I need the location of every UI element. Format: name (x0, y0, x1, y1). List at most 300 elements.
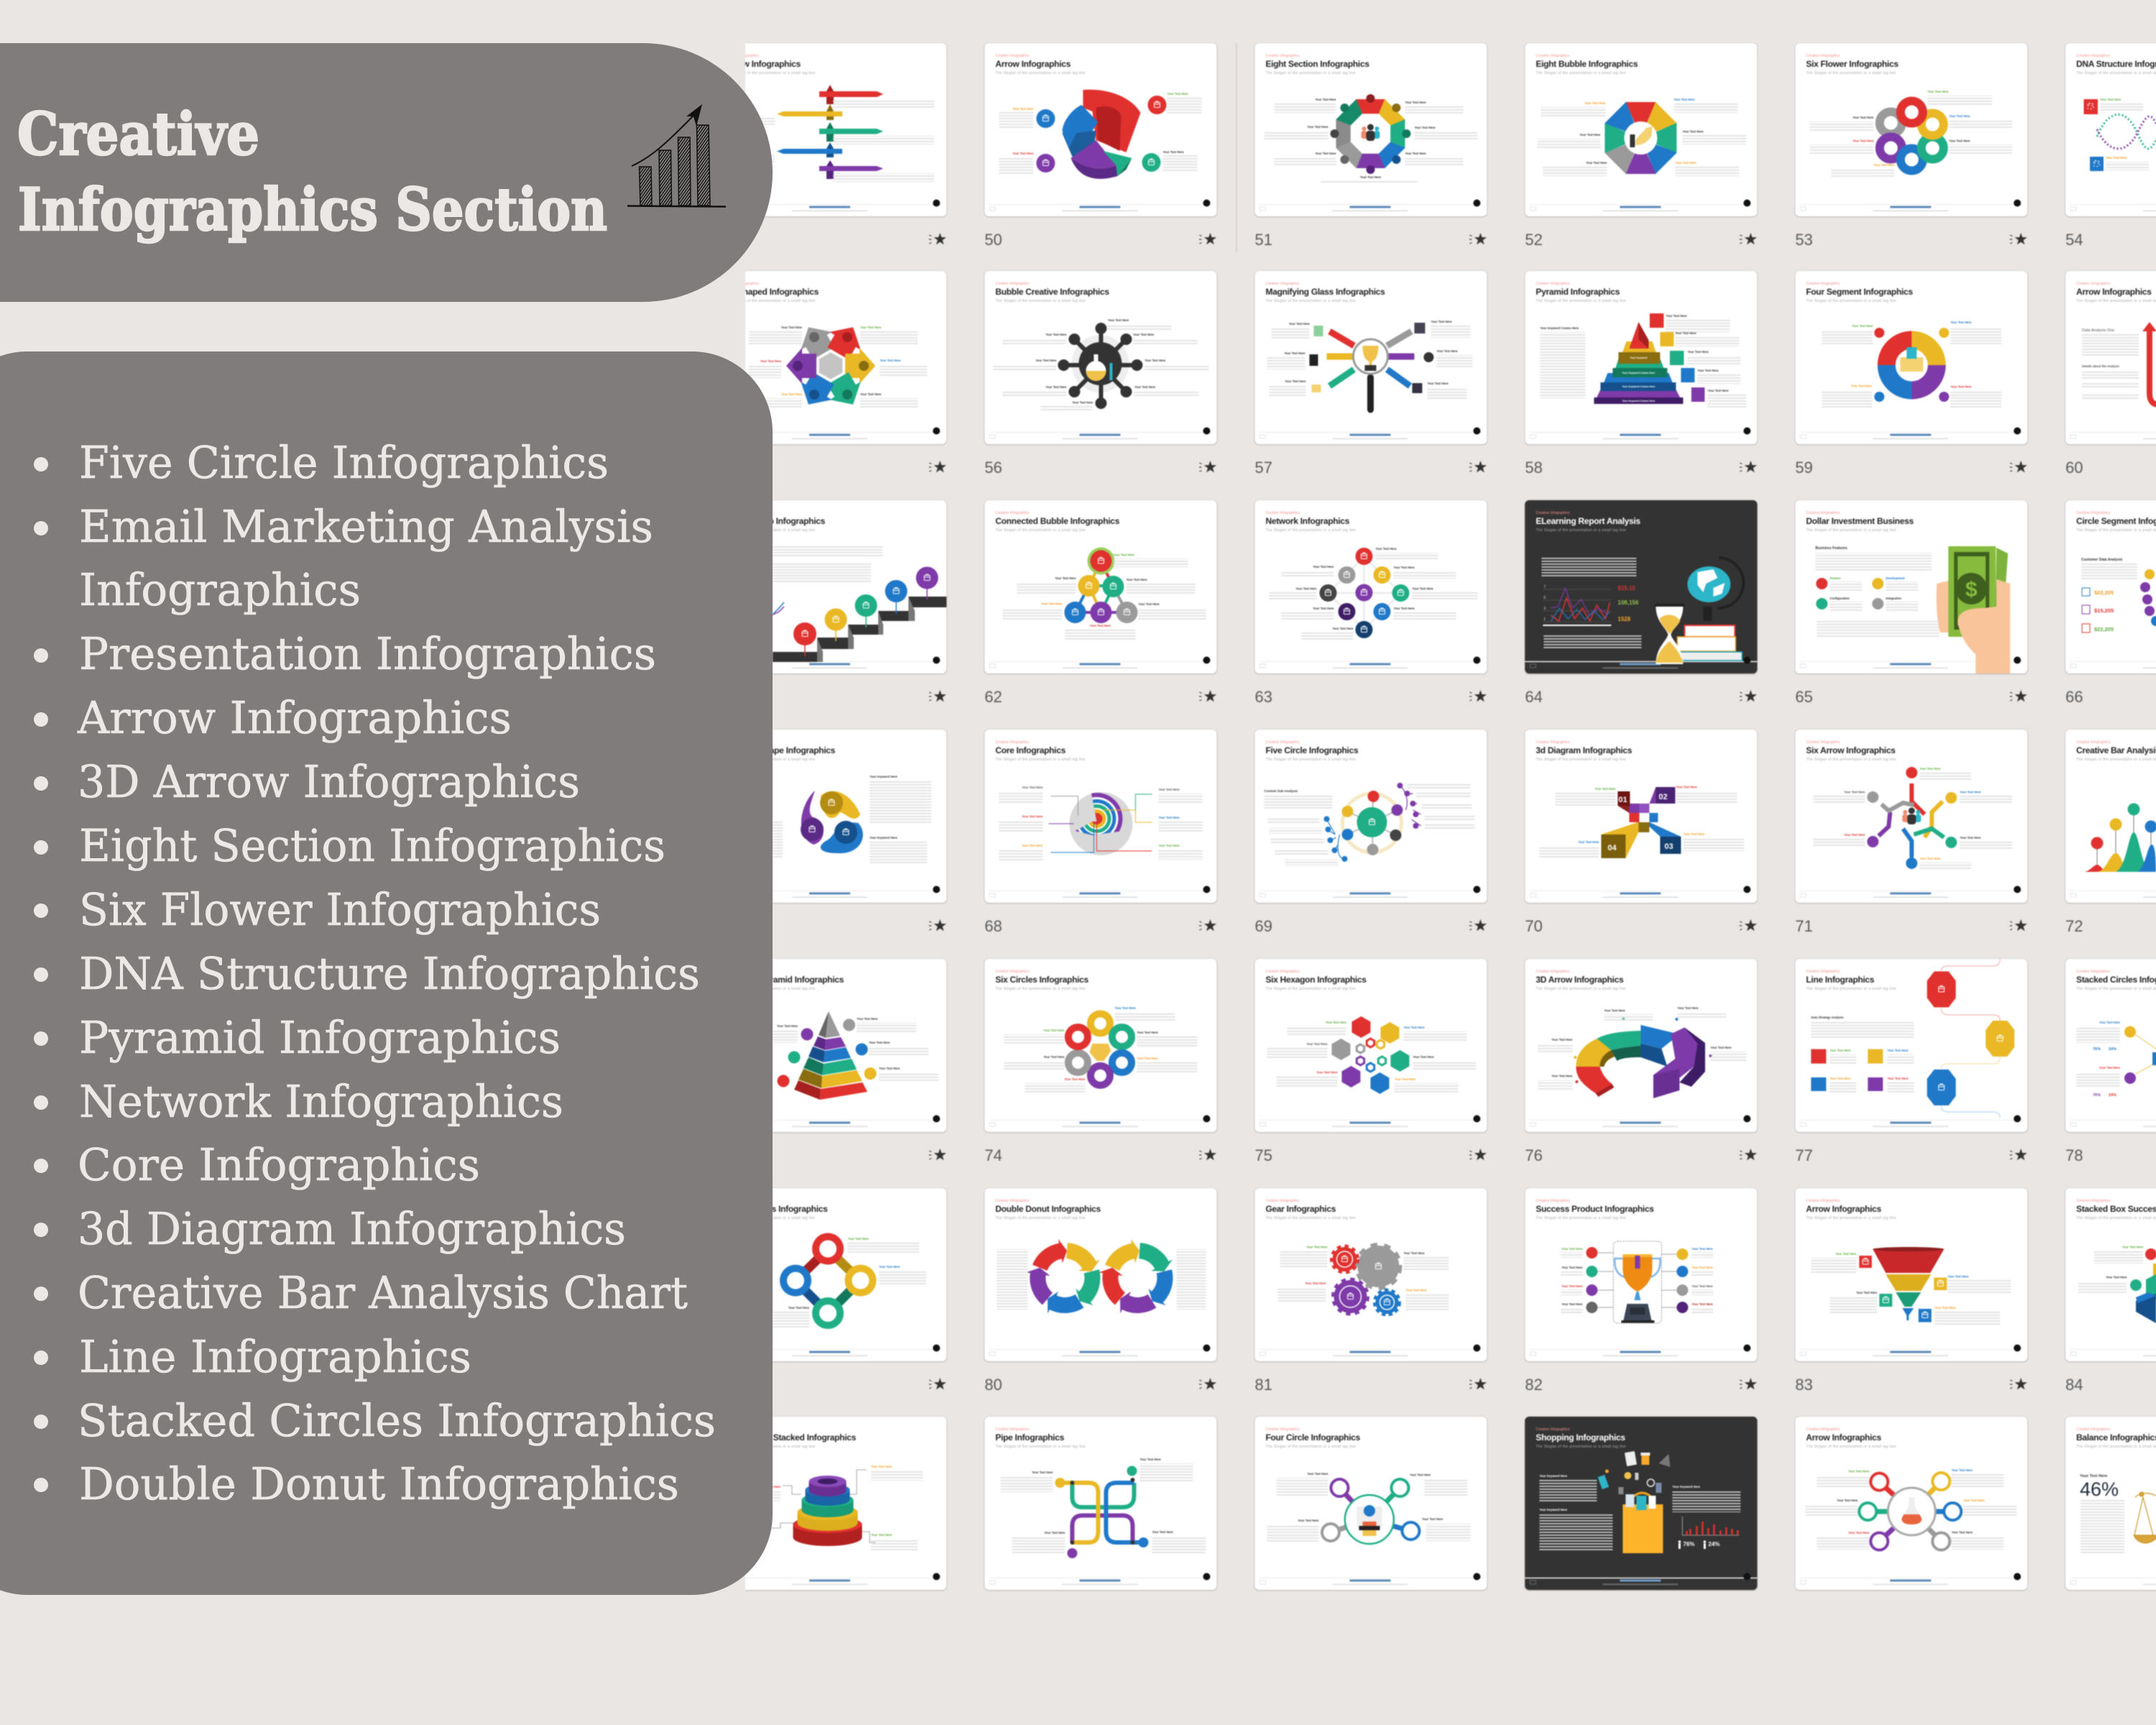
slide title: Creative Infographics (995, 740, 1030, 745)
slide title (1266, 282, 1386, 303)
icon: star (1199, 919, 1217, 931)
text blocks: Your Keyword Here (1539, 1474, 1567, 1478)
callouts: Your Text Here (1022, 844, 1044, 847)
callouts: Your Text Here (1952, 1531, 1973, 1534)
slide title: Creative Infographics (1536, 282, 1570, 286)
slide title: Dollar Investment Business (1806, 516, 1914, 526)
slide title (773, 746, 836, 762)
callouts: Your Text Here (1887, 1049, 1909, 1052)
callouts: Your Text Here (1437, 349, 1458, 353)
callouts: Your Text Here (1393, 607, 1415, 610)
card 69: Five Circle Infographics (1254, 729, 1488, 935)
slide title: Bubble Creative Infographics (995, 287, 1110, 297)
icon: star (1469, 233, 1487, 244)
slide title (1266, 1427, 1360, 1449)
callouts (1003, 553, 1206, 640)
slide title: Creative Infographics (1266, 1199, 1300, 1203)
callouts (1539, 786, 1744, 859)
icon: star (1739, 461, 1757, 472)
callouts: Your Text Here (1413, 1055, 1434, 1059)
slide title: 3d Diagram Infographics (1536, 745, 1632, 755)
diagram: hub with four circles (1322, 1479, 1419, 1544)
diagram: stacked boxes (2130, 1248, 2156, 1323)
slide title (1266, 511, 1356, 533)
stats: Customer Data Analysis (2081, 558, 2123, 562)
slide title: The Slogan of the presentation or a small tag line (1536, 987, 1626, 991)
text blocks: Your Keyword Here (1672, 1485, 1700, 1489)
slide title: Creative Infographics (1536, 511, 1570, 515)
card 84: Stacked Box Success (2065, 1187, 2156, 1394)
icon: rising bar chart with arrow (627, 104, 726, 207)
callouts: Your Keyword Comes Here (1540, 326, 1579, 330)
diagram: flask hub with six nodes (1859, 1473, 1961, 1550)
slide title: Creative Infographics (995, 970, 1030, 974)
chart: mound bars with pins (2085, 804, 2156, 872)
slide number: 77 (1795, 1146, 1812, 1164)
slide title (1266, 1199, 1356, 1220)
slide title: Creative Infographics (725, 740, 760, 745)
stats: $22,205 (2094, 626, 2114, 632)
callouts: Your Text Here (1055, 576, 1077, 580)
callouts: Your Text Here (1586, 161, 1608, 165)
slide title: Creative Infographics (725, 54, 760, 58)
slide number: 78 (2065, 1146, 2083, 1164)
slide title: Creative Infographics (2076, 740, 2111, 745)
slide title: The Slogan of the presentation or a small tag line (995, 987, 1086, 991)
callouts: Your Text Here (1332, 627, 1354, 630)
slide title: Creative Infographics (725, 1427, 760, 1432)
icon: star (2009, 233, 2027, 244)
callouts: Your Text Here (1675, 161, 1697, 165)
slide title (1536, 511, 1641, 533)
callouts: Your Text Here (1852, 324, 1874, 328)
callouts: Your Text Here (1022, 814, 1044, 818)
diagram: hub and branches (1324, 783, 1421, 862)
slide title: The Slogan of the presentation or a small tag line (1536, 528, 1626, 533)
card 65: Dollar Investment Business (1795, 500, 2028, 706)
list items: Network Infographics (79, 1075, 563, 1128)
callouts: Your Text Here (1692, 1284, 1713, 1288)
slide title (1806, 511, 1914, 533)
callouts: Your Text Here (848, 1237, 869, 1241)
callouts: Your Text Here (2100, 98, 2122, 101)
slide number: 58 (1525, 459, 1542, 477)
card 82: Success Product Infographics (1524, 1187, 1758, 1394)
diagram: staircase with pins (772, 566, 946, 662)
slide number: 72 (2065, 917, 2083, 935)
card: Shape Infographics (partly hidden) (773, 730, 947, 932)
slide title: Creative Infographics (1266, 1427, 1300, 1432)
slide title (2076, 282, 2156, 303)
callouts: Your Text Here (1167, 92, 1189, 96)
slide title: The Slogan of the presentation or a small tag line (1806, 1445, 1897, 1449)
icon: star (1469, 461, 1487, 472)
callouts: Your Text Here (1405, 152, 1427, 155)
icon: star (1739, 1378, 1757, 1389)
card: Shopping Infographics (1524, 1416, 1758, 1591)
callouts: Your Text Here (1137, 1057, 1158, 1060)
card: Stacked Infographics (partly hidden) (714, 1416, 947, 1591)
diagram: earth core cutaway (1049, 792, 1152, 855)
callouts: Your Text Here (1032, 1471, 1054, 1474)
icon: star (2009, 1149, 2027, 1160)
slide title: The Slogan of the presentation or a small tag line (1806, 71, 1897, 75)
diagram: 3D pyramid (778, 1011, 877, 1100)
slide title: Six Flower Infographics (1806, 59, 1899, 69)
callouts: Your Text Here (1851, 385, 1872, 388)
slide title (995, 282, 1110, 303)
slide title: Creative Infographics (995, 54, 1030, 58)
slide title: Ladder Step Infographics (726, 516, 826, 526)
slide title: Creative Infographics (1806, 970, 1841, 974)
slide title: Creative Infographics (1266, 282, 1300, 286)
list items: Presentation Infographics (79, 627, 656, 680)
card: Step Infographics (partly hidden) (773, 500, 947, 702)
callouts: Your Text Here (1948, 1275, 1969, 1278)
callouts: Your Text Here (1158, 816, 1180, 819)
callouts: Your Text Here (1710, 1046, 1732, 1049)
list items (77, 436, 716, 1510)
stats: $22,205 (2094, 589, 2114, 596)
callouts: Your Text Here (1046, 385, 1067, 389)
slide title: Four Circles Infographics (729, 1204, 828, 1214)
icon: star (2009, 1378, 2027, 1389)
callouts: Your Text Here (1887, 1077, 1909, 1080)
slide title: Double Donut Infographics (995, 1204, 1101, 1214)
card 76: 3D Arrow Infographics (1524, 959, 1758, 1164)
callouts: Your Text Here (1410, 1473, 1431, 1476)
callouts: Your Text Here (1835, 1252, 1857, 1256)
callouts: Your Text Here (1163, 150, 1184, 154)
callouts: Your Text Here (1393, 566, 1415, 569)
stats (2081, 558, 2137, 632)
callouts: Your Text Here (1145, 359, 1166, 362)
diagram: hexagon arrows (786, 326, 876, 405)
callouts (1822, 321, 2001, 408)
callouts (2082, 328, 2139, 399)
icon: star (1739, 690, 1757, 702)
callouts: Your Text Here (1837, 1499, 1858, 1502)
slide title (1806, 54, 1899, 75)
list bullets (34, 457, 48, 1492)
callouts: Your Text Here (2122, 1246, 2144, 1249)
slide title: Four Segment Infographics (1806, 287, 1913, 297)
chart: line chart: 3 (1544, 607, 1546, 611)
slide title: Arrow Infographics (1806, 1432, 1881, 1443)
callouts: Your Text Here (1036, 359, 1057, 362)
callouts (1538, 1006, 1746, 1090)
list items: Arrow Infographics (77, 691, 512, 744)
callouts: Your Text Here (1307, 1472, 1329, 1476)
callouts: Your Text Here (1284, 351, 1306, 355)
callouts: Your Text Here (1960, 791, 1981, 794)
callouts: Your Text Here (1676, 786, 1697, 789)
callouts: Your Text Here (1013, 152, 1034, 155)
callouts (749, 1465, 923, 1552)
callouts: Your Text Here (760, 1485, 781, 1489)
card 81: Gear Infographics (1254, 1187, 1488, 1394)
callouts (757, 1017, 939, 1082)
callouts: Your Text Here (1064, 1077, 1086, 1081)
callouts: Your Text Here (1313, 607, 1335, 610)
callouts: Your Text Here (1422, 1517, 1443, 1521)
card 59: Four Segment Infographics (1795, 270, 2028, 477)
callouts: 76% (2093, 1093, 2101, 1098)
card 60: Arrow Infographics (2065, 270, 2156, 477)
slide number: 64 (1525, 688, 1542, 706)
slide title: The Slogan of the presentation or a small tag line (995, 528, 1086, 533)
callouts: Your Text Here (1692, 1247, 1713, 1251)
callouts (1000, 1458, 1206, 1553)
slide title (725, 1199, 828, 1220)
callouts: Your Text Here (1325, 1021, 1347, 1024)
callouts (2078, 1246, 2144, 1294)
callouts: Your Text Here (1697, 369, 1719, 372)
diagram: stepped pyramid (1594, 313, 1705, 404)
slide title: The Slogan of the presentation or a small tag line (1806, 1216, 1897, 1220)
slide title: Creative Infographics (1536, 1199, 1570, 1203)
slide title: The Slogan of the presentation or a small tag line (1806, 299, 1897, 303)
slide number: 69 (1255, 917, 1272, 935)
callouts: Your Text Here (1604, 1009, 1626, 1012)
slide title: Pipe Infographics (995, 1432, 1064, 1443)
stats: 76% (1683, 1541, 1695, 1547)
callouts: Your Text Here (1856, 1291, 1878, 1294)
card 50: Arrow Infographics (984, 43, 1217, 249)
slide title: The Slogan of the presentation or a small tag line (1536, 1216, 1626, 1220)
list items: Infographics (79, 564, 361, 616)
callouts: Your Text Here (1687, 350, 1709, 354)
slide title (1806, 282, 1913, 303)
card 78: Stacked Circles Infographics (2065, 959, 2156, 1164)
diagram: triangle of bubbles (1064, 548, 1138, 623)
slide number: 63 (1255, 688, 1272, 706)
stats (1678, 1540, 1720, 1549)
slide title: 3D Arrow Infographics (1536, 975, 1624, 985)
slide title (2076, 511, 2156, 533)
slide title (995, 54, 1086, 75)
callouts (749, 326, 927, 408)
list items: Six Flower Infographics (79, 883, 601, 936)
callouts: Your Text Here (1134, 385, 1156, 389)
callouts: Your Text Here (1137, 1031, 1158, 1034)
slide title (995, 740, 1086, 762)
callouts: Your Text Here (1289, 322, 1310, 326)
callouts: Your Text Here (1949, 114, 1971, 118)
callouts: Your Text Here (1562, 1247, 1583, 1251)
slide title: Success Product Infographics (1536, 1204, 1654, 1214)
slide title: Creative Infographics (995, 1427, 1030, 1432)
heading: Creative (17, 101, 259, 169)
card 74: Six Circles Infographics (984, 959, 1217, 1164)
diagram: eight segment ring (1330, 94, 1411, 174)
diagram: 3D numbered cross: 03 (1664, 842, 1673, 851)
callouts: Your Text Here (1404, 1251, 1425, 1255)
callouts: Your Text Here (1674, 98, 1695, 101)
slide title: The Slogan of the presentation or a small tag line (1266, 299, 1356, 303)
slide title (995, 1427, 1086, 1449)
diagram: four segment ring (1874, 328, 1949, 402)
slide title: Creative Infographics (995, 282, 1030, 286)
icon: star (1739, 919, 1757, 931)
list items: DNA Structure Infographics (79, 947, 700, 1000)
slide title (1536, 1199, 1654, 1220)
callouts: Your Text Here (879, 1067, 900, 1070)
slide title: Creative Infographics (1806, 1199, 1841, 1203)
heading (17, 101, 607, 244)
diagram: crossing pipes (1055, 1466, 1148, 1558)
diagram: octagon of bubbles (1605, 102, 1677, 174)
callouts: Your Text Here (1133, 333, 1154, 336)
callouts: Your Text Here (1298, 1519, 1319, 1522)
callouts: Your Text Here (860, 392, 882, 396)
slide title: Creative Infographics (1536, 740, 1570, 745)
card 71: Six Arrow Infographics (1795, 729, 2028, 935)
callouts: Your Text Here (1404, 1026, 1425, 1029)
slide number: 65 (1795, 688, 1812, 706)
callouts: Your Text Here (1920, 767, 1941, 770)
slide title (773, 517, 826, 532)
slide number: 54 (2065, 231, 2083, 249)
callouts (2080, 1474, 2124, 1554)
panel: infographic list (0, 351, 773, 1595)
slide number: 84 (2065, 1376, 2083, 1394)
slide title: Arrow Infographics (2076, 287, 2152, 297)
slide title: Creative Infographics (995, 1199, 1030, 1203)
diagram: five arrows (777, 85, 883, 179)
callouts (749, 99, 934, 182)
slide number: 51 (1255, 231, 1272, 249)
callouts: Your Text Here (2080, 1474, 2107, 1478)
card 64: ELearning Report Analysis (1524, 500, 1758, 706)
list items: Pyramid Infographics (79, 1011, 561, 1064)
slide title: Creative Infographics (2076, 970, 2111, 974)
card: Arrow Infographics (1795, 1416, 2028, 1591)
callouts: Your Text Here (788, 1306, 810, 1310)
callouts: Your Text Here (1113, 553, 1135, 556)
callouts: Your Text Here (1296, 586, 1317, 591)
callouts: Your Text Here (1152, 1530, 1174, 1534)
callouts (999, 92, 1202, 174)
bulleted list (34, 436, 716, 1510)
slide title (995, 970, 1089, 991)
slide title (1806, 970, 1897, 991)
icon: star (929, 233, 946, 244)
callouts: Your Text Here (1138, 602, 1160, 606)
slide number: 81 (1255, 1376, 1272, 1394)
callouts: Your Text Here (2099, 1021, 2121, 1024)
callouts (1267, 1472, 1470, 1542)
callouts: Your Text Here (1317, 1071, 1338, 1075)
list items: Email Marketing Analysis (79, 500, 653, 553)
callouts: Your Text Here (1315, 98, 1337, 101)
slide title (995, 1199, 1101, 1220)
slide title: Pyramid Infographics (1536, 287, 1620, 297)
callouts: Your Text Here (1044, 1029, 1065, 1032)
icon: star (1739, 1149, 1757, 1160)
heading: Infographics Section (18, 176, 607, 244)
diagram: stepped pyramid: Your Keyword Comes Here (1622, 385, 1655, 388)
icon: star (929, 1378, 946, 1389)
card 72: Creative Bar Analysis Chart (2065, 729, 2156, 935)
card 70: 3d Diagram Infographics (1524, 729, 1758, 935)
card: Four Circle Infographics (1254, 1416, 1488, 1591)
slide title: The Slogan of the presentation or a small tag line (1536, 71, 1626, 75)
callouts: Your Text Here (1830, 1049, 1851, 1052)
text blocks: Your Keyword Here (1539, 1508, 1567, 1512)
callouts: Your Text Here (1578, 840, 1600, 844)
diagram: two arrow donuts (1017, 1233, 1180, 1325)
callouts: Your Text Here (1158, 788, 1180, 791)
card 66: Circle Segment Infographics (2065, 500, 2156, 706)
slide title: Six Hexagon Infographics (1266, 975, 1367, 985)
callouts (1267, 1021, 1476, 1093)
slide number: 50 (985, 231, 1002, 249)
chart: line chart: 5 (1544, 596, 1546, 600)
callouts: Your Text Here (1313, 565, 1335, 569)
callouts: Your Text Here (2099, 1066, 2121, 1070)
callouts: Your Text Here (1013, 107, 1034, 111)
callouts: Your Text Here (1158, 844, 1180, 847)
slide title: Eight Section Infographics (1266, 59, 1370, 69)
slide title: Six Arrow Infographics (1806, 745, 1896, 755)
card 54: DNA Structure Infographics (2065, 43, 2156, 249)
diagram: six squiggle arrows (1867, 767, 1957, 869)
slide number: 52 (1525, 231, 1542, 249)
slide title: Magnifying Glass Infographics (1266, 287, 1386, 297)
callouts: Your Text Here (857, 1017, 878, 1021)
slide title: Creative Infographics (2076, 1199, 2111, 1203)
icon: star (929, 919, 946, 931)
diagram: stepped pyramid: Your Keyword Comes Here (1622, 372, 1655, 374)
list items: 3D Arrow Infographics (78, 755, 580, 808)
slide title: Creative Pyramid Infographics (725, 975, 844, 985)
callouts: Development (1886, 576, 1905, 580)
list items: Eight Section Infographics (79, 819, 665, 872)
callouts: Your Text Here (1580, 133, 1601, 137)
list items: Five Circle Infographics (79, 436, 609, 489)
callouts: Your Text Here (1950, 321, 1972, 324)
slide title: Ring Stacked Infographics (752, 1432, 857, 1443)
callouts: Your Text Here (777, 1024, 798, 1028)
callouts: Your Text Here (1044, 1531, 1066, 1535)
callouts: Your Text Here (1394, 1077, 1416, 1081)
callouts (1269, 547, 1478, 640)
icon: star (2009, 461, 2027, 472)
slide title (2076, 1199, 2156, 1220)
slide title: Eight Bubble Infographics (1536, 59, 1638, 69)
slide number: 60 (2065, 459, 2083, 477)
slide title (745, 282, 819, 303)
slide title: The Slogan of the presentation or a small tag line (995, 1445, 1086, 1449)
callouts (1811, 1016, 1914, 1092)
icon: star (1469, 1378, 1487, 1389)
callouts (2076, 1021, 2121, 1098)
text blocks (1539, 1474, 1741, 1551)
card 83: Arrow Infographics (1795, 1187, 2028, 1394)
slide title (2076, 54, 2156, 75)
callouts: Content Sub-Analysis (1264, 789, 1298, 793)
slide title: Line Infographics (1806, 975, 1875, 985)
slide title: Creative Infographics (2076, 54, 2111, 58)
icon: star (1199, 1378, 1217, 1389)
card 56: Bubble Creative Infographics (984, 270, 1217, 477)
callouts: Integration (1886, 597, 1902, 600)
callouts: Your Text Here (1307, 1042, 1328, 1046)
slide title: The Slogan of the presentation or a small tag line (1266, 758, 1356, 762)
diagram: stepped pyramid: Your Keyword (1630, 356, 1647, 359)
slide number: 68 (985, 917, 1002, 935)
